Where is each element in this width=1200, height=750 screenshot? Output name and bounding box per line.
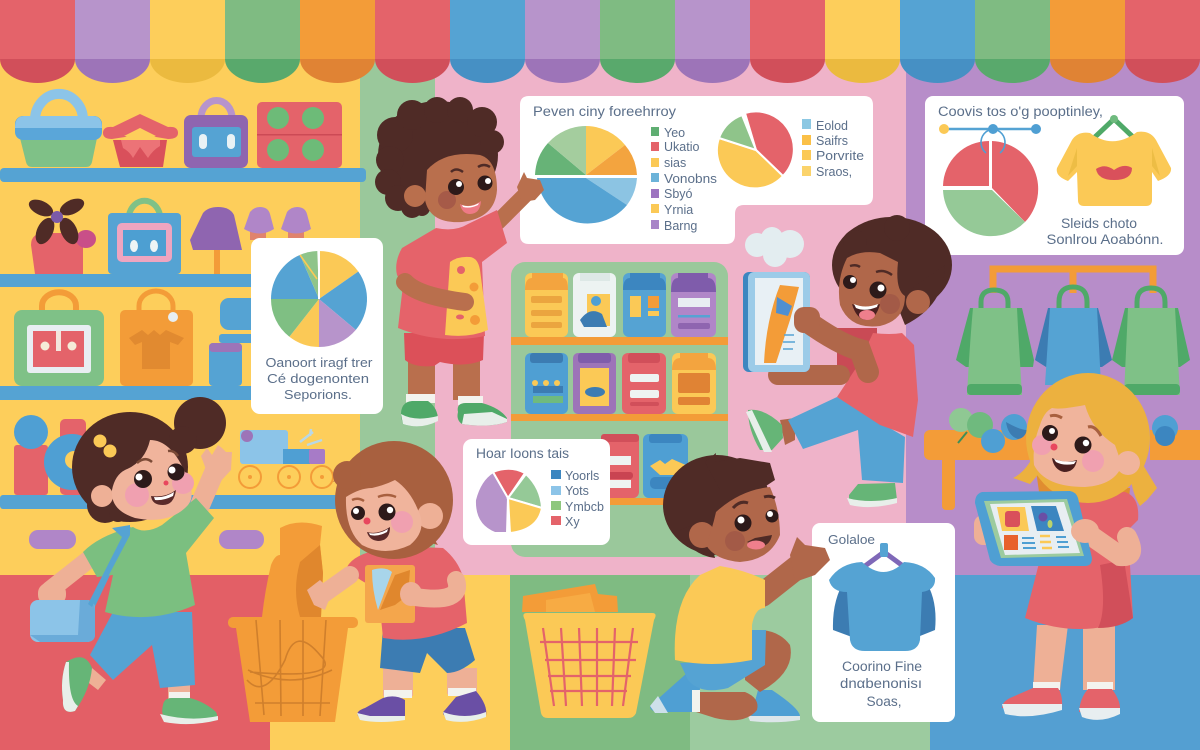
legs and shoes <box>401 360 507 426</box>
arm on tablet <box>1090 535 1131 556</box>
tablet with app screen <box>975 491 1092 566</box>
yellow basket with red grid <box>522 584 656 718</box>
light blue handbag <box>30 527 130 642</box>
legs and shoes <box>357 668 486 722</box>
caption text: Sonlrou Aoabónn. <box>1046 232 1164 247</box>
icon: green basket <box>15 94 102 167</box>
green shirt <box>83 498 214 617</box>
right rack with hanging bags <box>924 269 1200 510</box>
face <box>689 487 780 562</box>
yellow hair clip <box>94 434 116 458</box>
upper arm and hand <box>794 307 868 372</box>
legend 2: Porvrite <box>816 149 864 163</box>
heading: Hoar Ioons tais <box>476 446 569 461</box>
legend 1: Sbyó <box>664 187 693 201</box>
left arm and hand <box>38 560 88 605</box>
icon: blue containers <box>209 298 260 386</box>
left shelving with toys and bags <box>0 94 366 549</box>
caption text: Cé dogenonten <box>267 371 369 386</box>
heading: Coovis tos o'g pooptinley, <box>938 104 1103 119</box>
icon: green hanging bag 2 <box>1112 288 1190 395</box>
caption text: Oanoort iragf trer <box>266 355 373 370</box>
legend 1: Yrnia <box>664 203 693 217</box>
strap on shoulder <box>88 525 130 607</box>
back shoe and knee <box>745 630 800 722</box>
red dress <box>1025 492 1138 629</box>
icon: green hanging bag <box>956 290 1034 395</box>
red shorts <box>404 333 484 366</box>
panel: two pies with legends (top centre) <box>520 96 873 244</box>
icon: table with yarn balls <box>924 408 1200 510</box>
face <box>91 440 194 520</box>
face <box>839 252 930 327</box>
legend 1: sias <box>664 156 686 170</box>
curly hair <box>375 97 504 218</box>
pie chart 2 <box>717 111 794 188</box>
panel: blue shirt (lower right) <box>812 523 955 722</box>
legend 1 <box>651 126 717 233</box>
icon: flower toy <box>26 195 96 274</box>
caption text: Coorino Fine <box>842 659 922 674</box>
heading: Golaloe <box>828 532 875 547</box>
caption text <box>1046 216 1164 247</box>
orange basket with items <box>228 522 358 722</box>
caption text <box>840 659 922 709</box>
heading: Peven ciny foreehrroy <box>533 104 676 119</box>
legend 1: Barng <box>664 219 697 233</box>
card held by boy <box>365 565 415 623</box>
panel: pie and yellow shirt (top right) <box>925 96 1184 255</box>
yellow shirt <box>675 566 765 664</box>
holding arm <box>405 282 465 302</box>
caption text: Sleids choto <box>1061 216 1137 231</box>
arm and hand over card <box>400 580 457 606</box>
icon: yellow shirt on hanger <box>1057 115 1171 206</box>
panel: pie with caption (left) <box>251 238 383 414</box>
pie chart 1 <box>535 126 637 223</box>
back hair <box>1036 470 1130 510</box>
raised arm and hand <box>198 445 232 510</box>
child: kneeling boy in yellow shirt <box>650 453 830 722</box>
blue shorts <box>788 397 905 483</box>
dark red back panel <box>837 328 877 381</box>
child: girl with bun and green shirt <box>30 397 232 724</box>
legend 1: Ukatio <box>664 140 699 154</box>
caption text: Soas, <box>866 694 902 709</box>
face <box>346 480 443 551</box>
red shirt <box>396 210 507 339</box>
front leg and shoe <box>160 680 218 724</box>
legend 2: Sraos, <box>816 165 852 179</box>
caption text: dnαbenonisı <box>840 676 922 691</box>
icon: bottom row jars <box>601 434 688 498</box>
dark blue shorts <box>380 628 475 673</box>
child: boy holding tablet <box>743 215 952 507</box>
legend: Ymbcb <box>565 500 604 514</box>
child: blonde girl holding tablet <box>974 373 1157 720</box>
icon: toy train <box>239 429 333 488</box>
legs and shoes <box>746 410 897 507</box>
icon: top row jars <box>525 273 716 337</box>
blue shorts <box>680 630 766 690</box>
centre shelf with jars <box>511 262 728 557</box>
yellow cheese block <box>445 257 488 336</box>
back leg and shoe <box>62 657 106 712</box>
legend 2: Eolod <box>816 119 848 133</box>
icon: lamps <box>190 207 311 274</box>
icon: blue shirt on hanger <box>829 543 936 651</box>
blonde hair <box>1013 373 1157 506</box>
brown hair <box>333 441 453 559</box>
raised arm and hand <box>498 172 544 222</box>
caption text: Seporions. <box>284 387 352 402</box>
face <box>404 154 497 222</box>
legend: Yoorls <box>565 469 599 483</box>
caption text <box>266 355 373 402</box>
hair and bun <box>72 397 226 523</box>
icon: green screen bag <box>14 292 104 386</box>
icon: purple bag <box>184 100 248 168</box>
icon: red block toy <box>257 102 342 168</box>
icon: building blocks <box>14 415 100 495</box>
face <box>1032 405 1140 487</box>
red shirt <box>347 547 467 640</box>
hair <box>663 453 775 558</box>
child: boy in red shirt holding card <box>307 441 486 722</box>
legend 2: Saifrs <box>816 134 848 148</box>
panel: pie with legend (lower centre) <box>463 439 610 545</box>
slider decoration <box>939 124 1041 134</box>
legend: Xy <box>565 515 580 529</box>
legs and shoes <box>1002 625 1120 720</box>
blue shorts <box>90 612 195 688</box>
legend 2 <box>802 119 864 179</box>
child: boy with curly hair holding cheese <box>375 97 544 426</box>
pie chart <box>943 129 1038 236</box>
icon: blue bag <box>108 201 181 274</box>
icon: purple pills <box>29 530 264 549</box>
red shirt <box>837 333 918 437</box>
legend 1: Vonobns <box>664 172 717 186</box>
pie chart <box>271 250 367 347</box>
legend 1: Yeo <box>664 126 685 140</box>
legend <box>551 469 604 529</box>
icon: blue hanging bag <box>1035 287 1112 385</box>
legend: Yots <box>565 484 589 498</box>
reaching arm and hand <box>762 537 830 595</box>
tablet <box>743 272 810 372</box>
arms <box>307 575 350 610</box>
icon: middle row jars <box>525 353 716 414</box>
cloud decoration <box>745 227 804 267</box>
front leg and shoe <box>650 673 758 720</box>
right hand <box>1071 519 1099 543</box>
icon: orange shirt bag <box>120 291 193 386</box>
pie chart <box>475 469 542 533</box>
icon: red basket <box>103 114 178 167</box>
lower arm <box>778 365 840 385</box>
hair <box>832 215 952 325</box>
striped awning <box>0 0 1200 83</box>
left hand <box>974 515 994 545</box>
